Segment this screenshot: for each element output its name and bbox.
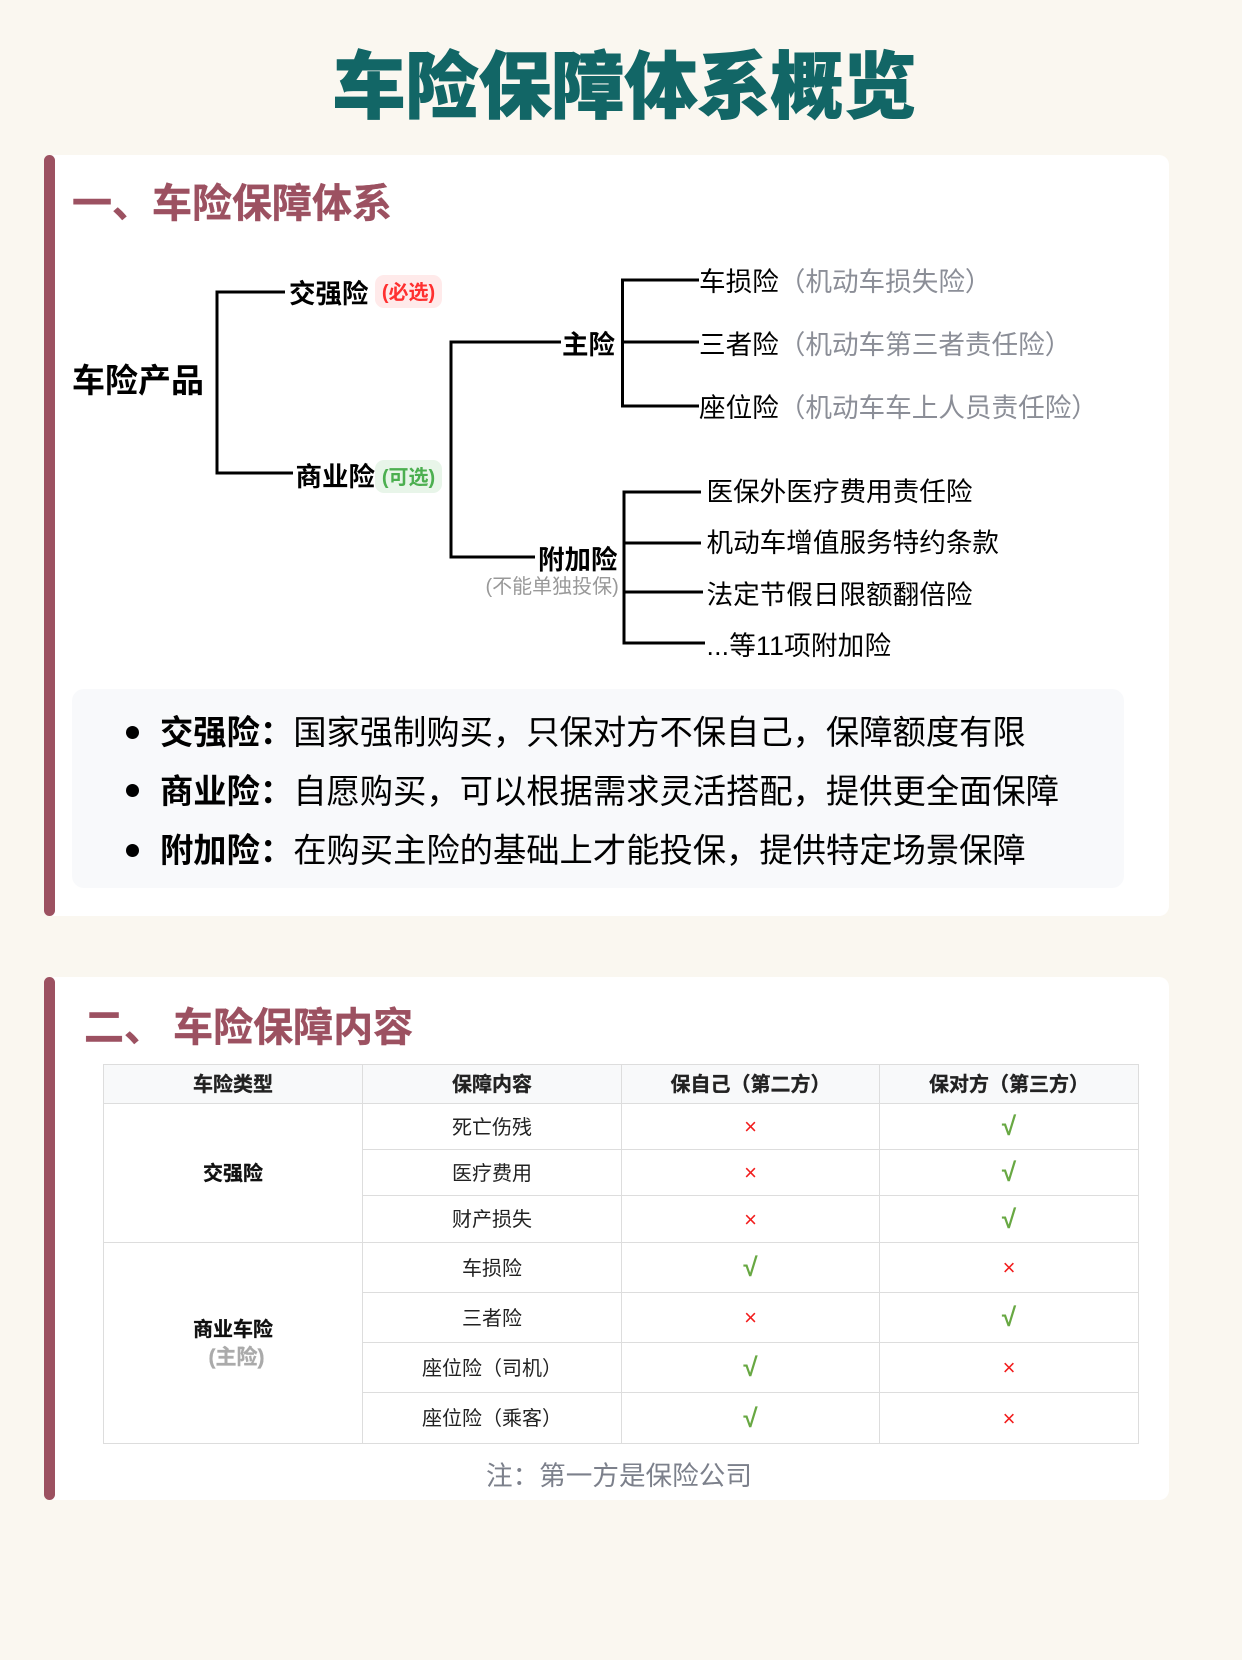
coverage table: √ — [1002, 1204, 1016, 1234]
node: commercial insurance: 商业险 — [296, 462, 375, 492]
panel: insurance system — [44, 155, 1169, 916]
coverage table: × — [1003, 1255, 1015, 1280]
coverage table: √ — [1002, 1111, 1016, 1141]
note: additional cannot be sold alone: (不能单独投保) — [486, 576, 619, 598]
node: compulsory insurance: 交强险 — [289, 279, 368, 309]
coverage table: × — [1003, 1406, 1015, 1430]
panel accent bar: coverage content — [44, 977, 55, 1500]
leaf: outside medical: 医保外医疗费用责任险 — [706, 477, 972, 507]
coverage table: 座位险（乘客） — [422, 1408, 562, 1430]
coverage table: 保自己（第二方） — [670, 1074, 830, 1096]
coverage table: 车损险 — [462, 1258, 522, 1280]
leaf: others: ...等11项附加险 — [706, 631, 891, 661]
tree diagram — [72, 267, 1098, 661]
bullet dot 2 — [126, 784, 139, 797]
bullet: commercial: 商业险：自愿购买，可以根据需求灵活搭配，提供更全面保障 — [160, 774, 1059, 811]
heading: section two: 二、 车险保障内容 — [84, 1006, 413, 1050]
leaf: holiday: 法定节假日限额翻倍险 — [706, 580, 972, 610]
heading: section one: 一、车险保障体系 — [72, 182, 392, 226]
coverage table: × — [744, 1305, 757, 1330]
bullet dot 3 — [126, 844, 139, 857]
leaf: value added service: 机动车增值服务特约条款 — [706, 528, 999, 558]
coverage table: 死亡伤残 — [452, 1116, 532, 1138]
leaf: seat: 座位险（机动车车上人员责任险） — [699, 393, 1098, 423]
bullet dot 1 — [126, 726, 139, 739]
leaf: vehicle damage: 车损险（机动车损失险） — [699, 267, 992, 297]
coverage table: 车险类型 — [193, 1074, 273, 1096]
coverage table: × — [1003, 1355, 1015, 1380]
node: additional insurance: 附加险 — [538, 545, 618, 575]
bullet: additional: 附加险：在购买主险的基础上才能投保，提供特定场景保障 — [160, 833, 1026, 870]
bullet: compulsory: 交强险：国家强制购买，只保对方不保自己，保障额度有限 — [160, 715, 1026, 752]
tag: required: (必选) — [382, 282, 435, 304]
coverage table: 保对方（第三方） — [929, 1074, 1089, 1096]
coverage table: √ — [1002, 1302, 1016, 1332]
panel: summary bullets — [72, 689, 1124, 888]
coverage table: (主险) — [208, 1346, 264, 1369]
leaf: third party: 三者险（机动车第三者责任险） — [699, 330, 1071, 360]
coverage table: √ — [743, 1252, 758, 1282]
tree connector lines — [216, 278, 705, 644]
panel: coverage content — [44, 977, 1169, 1500]
coverage table: × — [744, 1160, 757, 1185]
table note: 注：第一方是保险公司 — [486, 1461, 752, 1491]
coverage table: √ — [1002, 1157, 1016, 1187]
panel accent bar: insurance system — [44, 155, 55, 916]
tag: optional — [375, 460, 442, 493]
root node: 车险产品 — [72, 362, 204, 399]
coverage table: √ — [743, 1352, 758, 1382]
coverage table: × — [744, 1206, 757, 1232]
coverage table: 座位险（司机） — [422, 1358, 562, 1380]
coverage table: 三者险 — [462, 1308, 522, 1330]
coverage table: 医疗费用 — [452, 1162, 532, 1184]
coverage table: × — [744, 1114, 757, 1139]
tag: required — [375, 275, 442, 308]
coverage table: 财产损失 — [452, 1209, 532, 1231]
coverage table: 保障内容 — [452, 1074, 532, 1096]
coverage table: √ — [743, 1402, 758, 1432]
coverage table — [103, 1064, 1139, 1444]
title: 车险保障体系概览 — [332, 47, 916, 128]
tag: optional: (可选) — [382, 467, 435, 489]
coverage table: 商业车险 — [193, 1319, 273, 1341]
coverage table: 交强险 — [203, 1163, 263, 1185]
node: main insurance: 主险 — [562, 330, 615, 360]
